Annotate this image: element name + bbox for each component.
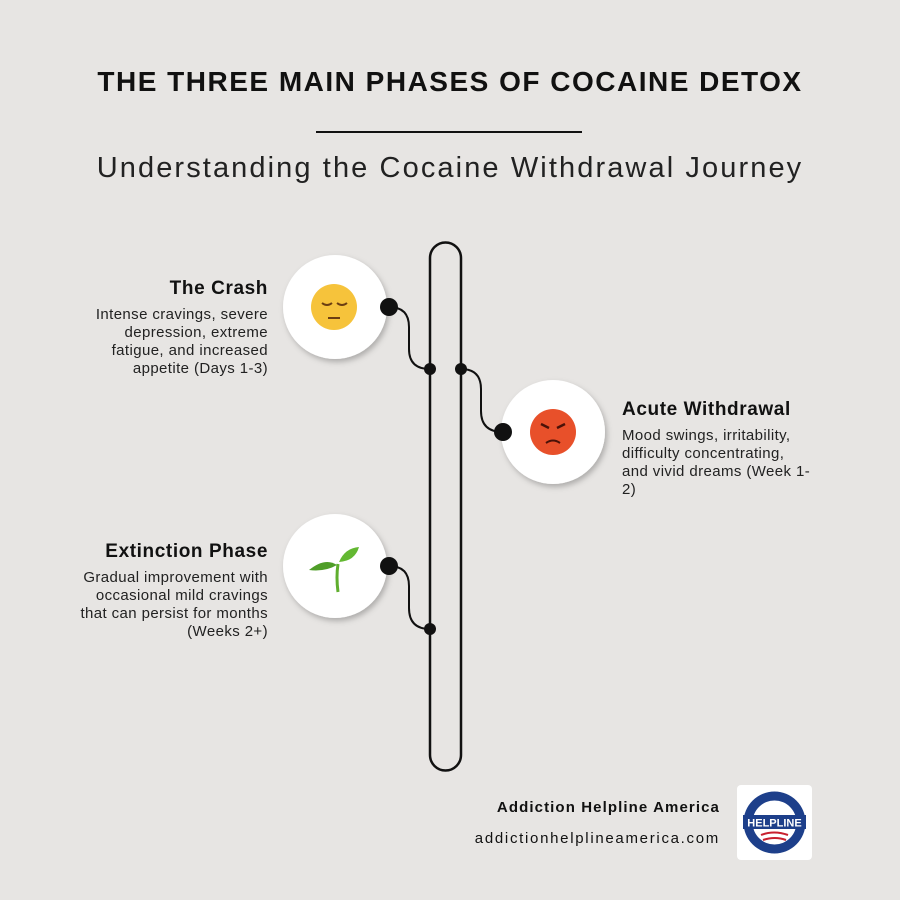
track xyxy=(430,242,461,770)
text: acute withdrawal: 2) xyxy=(622,481,636,498)
icon: crash sad face xyxy=(283,255,387,359)
text: the crash: The Crash xyxy=(170,278,268,299)
text: acute withdrawal: Mood swings, irritability, xyxy=(622,427,791,444)
text: extinction phase: Gradual improvement with xyxy=(83,569,268,586)
text: the crash: fatigue, and increased xyxy=(112,342,268,359)
text: the crash: depression, extreme xyxy=(124,324,268,341)
logo xyxy=(737,785,812,860)
footer brand xyxy=(475,799,720,847)
text: acute withdrawal: and vivid dreams (Week 1- xyxy=(622,463,810,480)
connector: extinction xyxy=(380,557,436,635)
text: extinction phase: occasional mild cravings xyxy=(96,587,268,604)
text: extinction phase: (Weeks 2+) xyxy=(187,623,268,640)
divider xyxy=(316,131,582,133)
icon: seedling xyxy=(283,514,387,618)
text: extinction phase: that can persist for months xyxy=(80,605,268,622)
title: THE THREE MAIN PHASES OF COCAINE DETOX xyxy=(97,66,803,97)
text: the crash: Intense cravings, severe xyxy=(96,306,268,323)
footer brand: Addiction Helpline America xyxy=(497,799,720,816)
subtitle: Understanding the Cocaine Withdrawal Journey xyxy=(97,152,803,184)
connector: acute xyxy=(455,363,512,441)
footer brand: addictionhelplineamerica.com xyxy=(475,830,720,847)
icon: acute angry face xyxy=(501,380,605,484)
connector: crash xyxy=(380,298,436,375)
text: acute withdrawal xyxy=(622,399,810,498)
logo: HELPLINE xyxy=(747,818,802,830)
text: the crash xyxy=(96,278,268,377)
text: extinction phase xyxy=(80,541,268,640)
text: acute withdrawal: Acute Withdrawal xyxy=(622,399,791,420)
text: acute withdrawal: difficulty concentrating, xyxy=(622,445,784,462)
text: the crash: appetite (Days 1-3) xyxy=(133,360,268,377)
text: extinction phase: Extinction Phase xyxy=(105,541,268,562)
